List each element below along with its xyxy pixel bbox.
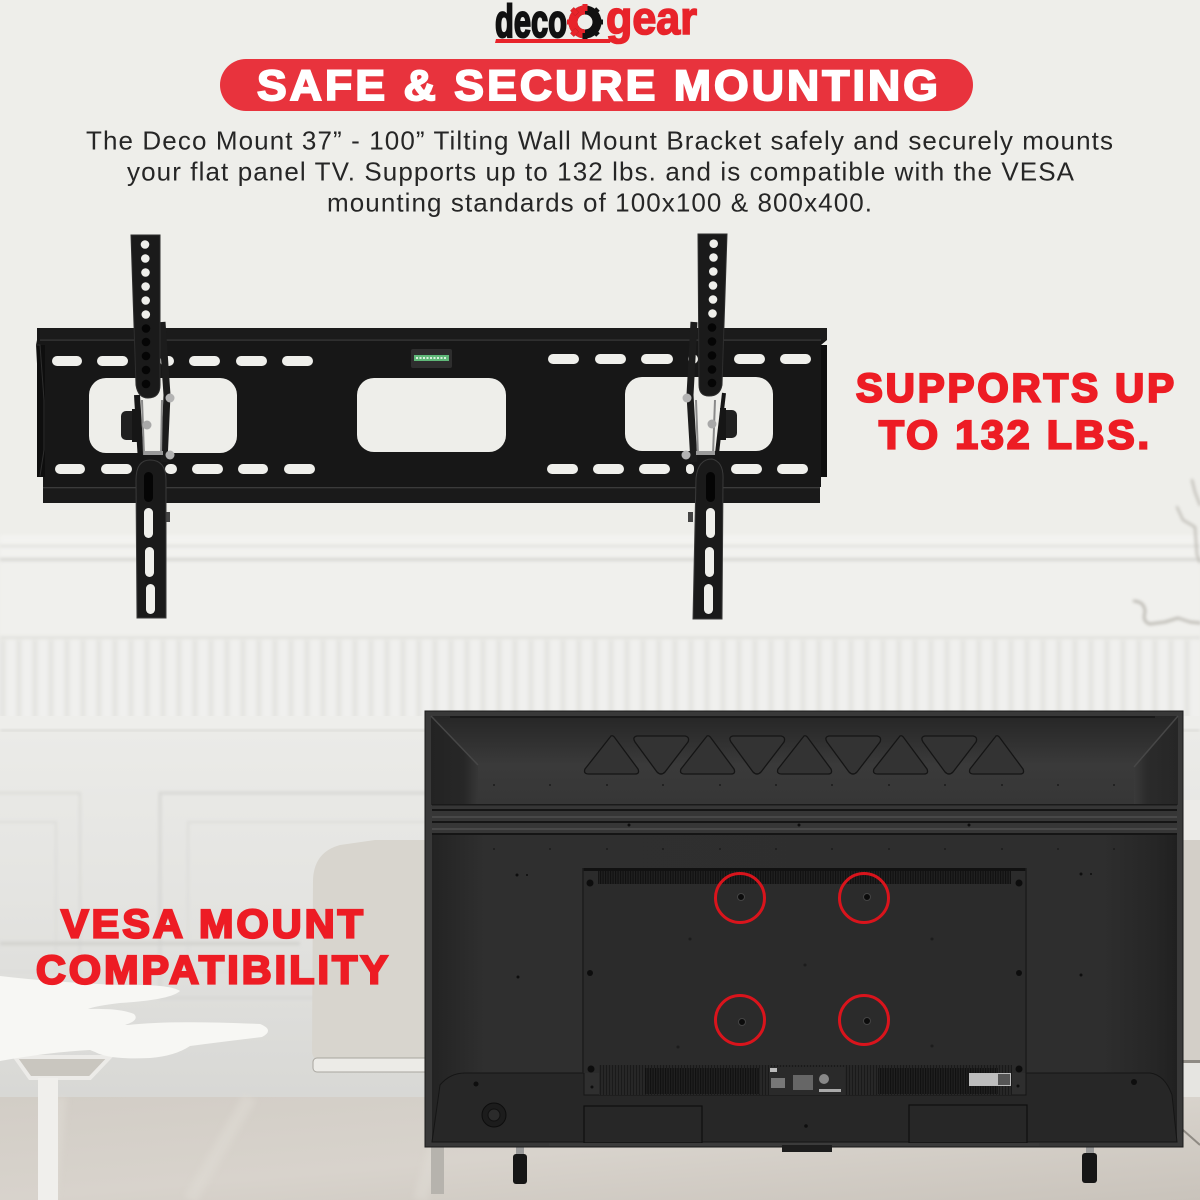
description text (86, 126, 1113, 218)
callout: supports up to 132 lbs: TO 132 LBS. (879, 414, 1152, 458)
red highlight circles on VESA holes (716, 874, 888, 1044)
description text: your flat panel TV. Supports up to 132 lbs. and is compatible with the VESA (127, 156, 1075, 186)
TV ribs (432, 804, 1177, 835)
callout: VESA mount compatibility (36, 902, 391, 992)
TV screw dots (474, 824, 1137, 1128)
callout: supports up to 132 lbs (856, 366, 1177, 458)
callout: VESA mount compatibility: VESA MOUNT (61, 902, 366, 946)
bracket wall plate (36, 328, 827, 503)
TV VESA recessed panel (583, 868, 1026, 1073)
right lower arm (688, 459, 723, 619)
VESA mounting holes (738, 894, 870, 1026)
right upper arm (698, 234, 727, 396)
bracket large cut-outs (89, 377, 773, 453)
callout: supports up to 132 lbs: SUPPORTS UP (856, 366, 1177, 410)
table leg behind TV foot (431, 1147, 444, 1194)
TV lower body (432, 835, 1177, 1142)
TV upper bevel (431, 716, 1178, 805)
TV bottom edge strip (549, 1143, 1039, 1152)
sofa (312, 800, 1200, 1145)
description text: The Deco Mount 37” - 100” Tilting Wall Mount Bracket safely and securely mounts (86, 126, 1113, 156)
TV outer shell (425, 711, 1183, 1147)
plant sprigs (1134, 480, 1200, 624)
left tilt hinge (121, 322, 174, 462)
title banner: SAFE & SECURE MOUNTING (257, 62, 941, 110)
side table (0, 976, 268, 1200)
left lower arm (136, 460, 170, 618)
TV joystick button (482, 1103, 506, 1127)
TV vent strip and rating labels (599, 1065, 1012, 1095)
wall mount bracket (36, 234, 827, 619)
left upper arm (131, 235, 160, 398)
logo gear icon (567, 4, 603, 40)
logo: Deco Gear (495, 0, 697, 47)
callout: VESA mount compatibility: COMPATIBILITY (36, 948, 391, 992)
bubble level (411, 349, 452, 368)
TV rear view (425, 711, 1183, 1152)
TV ventilation triangles (584, 736, 1024, 774)
TV lower compartments (584, 1105, 1027, 1143)
TV feet (513, 1146, 1097, 1184)
TV bottom curved section (432, 1073, 1177, 1142)
bracket slots (52, 354, 811, 474)
description text: mounting standards of 100x100 & 800x400. (327, 188, 872, 218)
right tilt hinge (682, 322, 737, 462)
